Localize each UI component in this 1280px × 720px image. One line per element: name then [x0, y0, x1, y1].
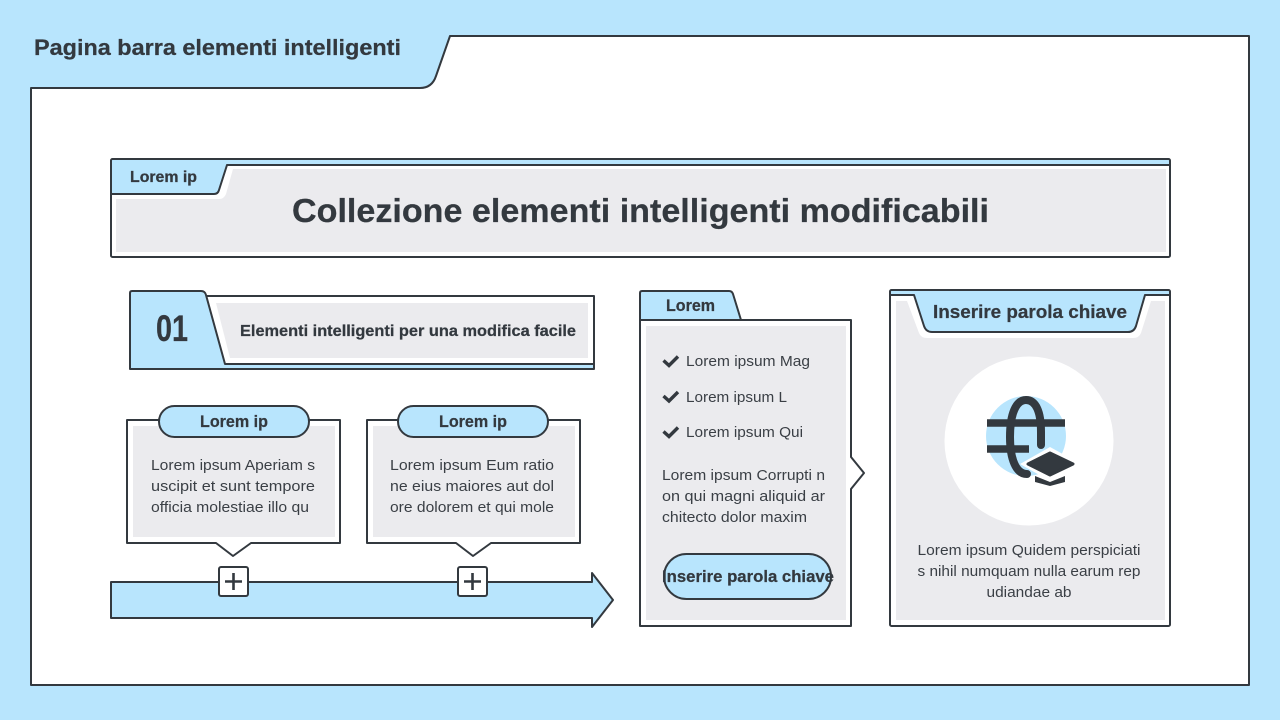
second card text: Lorem ipsum Eum ratio [390, 457, 554, 474]
number tab [130, 291, 594, 369]
checklist paragraph [662, 467, 825, 526]
arrow: timeline [111, 573, 613, 627]
panel: header banner [111, 159, 1170, 257]
numbered bar top and right border [207, 296, 594, 369]
panel: keyword card [890, 290, 1170, 626]
checklist gray area [646, 326, 846, 620]
first card text: officia molestiae illo qu [151, 499, 309, 516]
panel: checklist card [640, 291, 864, 626]
second card pill label: Lorem ip [439, 413, 507, 431]
keyword card text: Lorem ipsum Quidem perspiciati [918, 542, 1140, 559]
header heading: Collezione elementi intelligenti modificabili [292, 192, 989, 229]
numbered bar white body [207, 296, 594, 364]
second card text: ore dolorem et qui mole [390, 499, 554, 516]
first card gray area [133, 426, 335, 537]
keyword card blue band and tab [890, 290, 1170, 332]
icon circle [944, 356, 1114, 526]
checklist tab [640, 291, 741, 320]
icon: first plus marker [219, 567, 248, 596]
checklist button label: Inserire parola chiave [662, 568, 834, 586]
check items: Lorem ipsum Mag [686, 353, 810, 370]
icon: second plus marker [458, 567, 487, 596]
keyword card text: s nihil numquam nulla earum rep [918, 563, 1140, 580]
keyword tab label: Inserire parola chiave [933, 301, 1127, 322]
first card pill label: Lorem ip [200, 413, 268, 431]
checklist paragraph: chitecto dolor maxim [662, 509, 807, 526]
second card gray area [373, 426, 575, 537]
first card text: uscipit et sunt tempore [151, 478, 315, 495]
keyword card gray area [896, 301, 1165, 620]
page title: Pagina barra elementi intelligenti [34, 35, 401, 60]
keyword tab outline [890, 295, 1170, 332]
header outer border [111, 159, 1170, 257]
card: first timeline callout [127, 406, 340, 556]
check items: Lorem ipsum L [686, 389, 787, 406]
panel: numbered bar [130, 291, 594, 369]
checklist body [640, 320, 864, 626]
header tab label: Lorem ip [130, 169, 197, 186]
icon: globe with graduation cap [986, 396, 1081, 486]
first card text [151, 457, 315, 516]
check items [664, 353, 810, 441]
numbered bar text: Elementi intelligenti per una modifica facile [240, 323, 576, 340]
checklist button [664, 554, 831, 599]
numbered bar gray area [216, 303, 588, 358]
number 01: 01 [156, 308, 188, 349]
checklist paragraph: Lorem ipsum Corrupti n [662, 467, 825, 484]
check items: Lorem ipsum Qui [686, 424, 803, 441]
checklist paragraph: on qui magni aliquid ar [662, 488, 825, 505]
second card text [390, 457, 554, 516]
checklist tab label: Lorem [666, 297, 715, 315]
second card text: ne eius maiores aut dol [390, 478, 554, 495]
header gray inner area [116, 169, 1166, 252]
first card pill [159, 406, 309, 437]
card: second timeline callout [367, 406, 580, 556]
second card pill [398, 406, 548, 437]
header tab and blue band [111, 159, 1170, 194]
keyword card text [918, 542, 1140, 601]
header tab outline [111, 165, 1170, 194]
first card text: Lorem ipsum Aperiam s [151, 457, 315, 474]
keyword card text: udiandae ab [986, 584, 1072, 601]
keyword card outer border [890, 290, 1170, 626]
